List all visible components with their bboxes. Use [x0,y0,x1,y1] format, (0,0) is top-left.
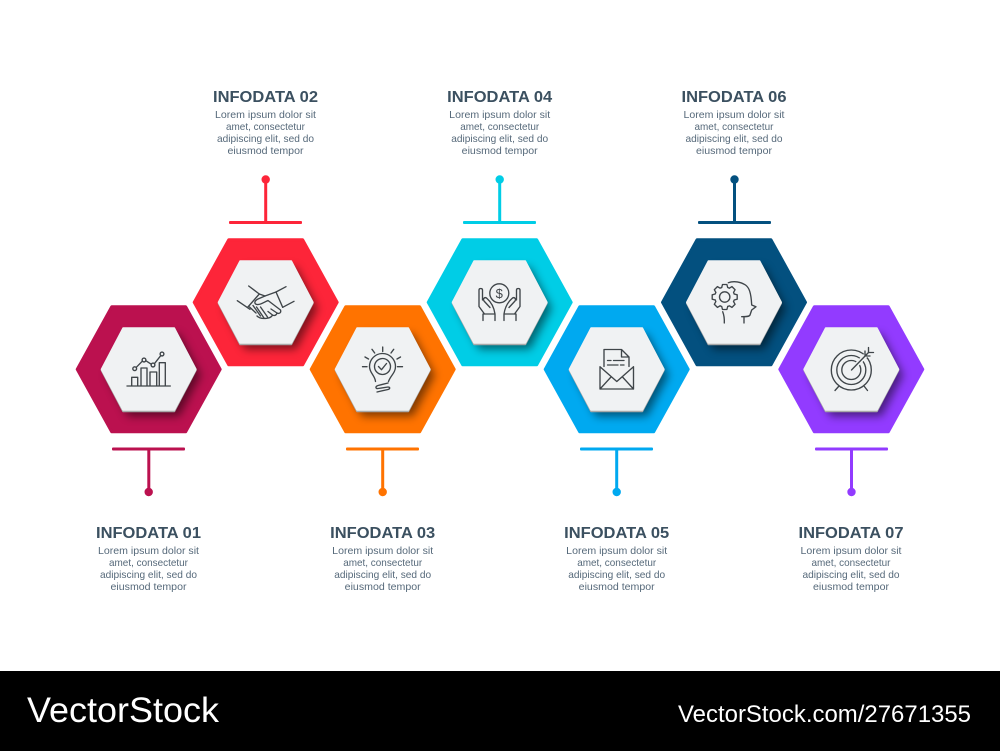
text: infodata 06: amet, consectetur [694,121,774,133]
text: infodata 04: Lorem ipsum dolor sit [449,109,550,121]
icon: hands holding coin [479,284,520,320]
text: infodata 05: adipiscing elit, sed do [568,569,665,581]
hexagon 03 [311,307,454,432]
connector 06 [698,175,771,224]
hexagon 06 [662,240,806,365]
connector 04 [463,175,536,224]
connector 02 [229,175,302,224]
text: infodata 05: INFODATA 05 [564,525,669,542]
text: infodata 03: INFODATA 03 [330,525,435,542]
text: infodata 01 [96,525,201,593]
text: infodata 02: eiusmod tempor [228,145,304,157]
panel: infodata 07 [780,307,923,593]
connector 03 [346,448,419,496]
text: infodata 06 [682,89,787,157]
text: infodata 01: Lorem ipsum dolor sit [98,545,199,557]
text: infodata 07: Lorem ipsum dolor sit [800,545,902,557]
text: infodata 03: Lorem ipsum dolor sit [332,545,433,557]
hexagon 01 [77,307,220,432]
text: infodata 06: INFODATA 06 [682,89,787,106]
text: infodata 05: Lorem ipsum dolor sit [566,545,667,557]
text: infodata 02: amet, consectetur [226,121,305,133]
text: infodata 03: eiusmod tempor [345,581,421,593]
panel: infodata 03 [311,307,454,593]
text: infodata 06: Lorem ipsum dolor sit [684,109,785,121]
text: infodata 04: amet, consectetur [460,121,540,133]
icon: light bulb [362,347,402,392]
text: infodata 02: INFODATA 02 [213,89,318,106]
brand name: VectorStock [27,691,220,730]
text: infodata 04: INFODATA 04 [447,89,552,106]
text: infodata 07 [798,525,904,593]
hexagon 07 [780,307,923,432]
panel: infodata 05 [545,307,688,593]
hexagon 04 [428,240,571,365]
icon: head with gear [712,282,756,323]
text: infodata 03: amet, consectetur [343,557,423,569]
icon: envelope with document [600,350,634,389]
hexagon 02 [194,240,337,365]
icon: target with arrow [831,348,874,390]
hexagon 05 [545,307,688,432]
connector 05 [580,448,653,496]
text: infodata 01: eiusmod tempor [110,581,187,593]
text: infodata 07: adipiscing elit, sed do [802,569,900,581]
icon: handshake [237,286,294,318]
watermark bar [0,671,1000,751]
icon: hands holding coin: $ [496,286,504,301]
panel: infodata 04 [428,89,571,365]
text: infodata 04 [447,89,552,157]
text: infodata 01: INFODATA 01 [96,525,201,542]
text: infodata 02: Lorem ipsum dolor sit [215,109,316,121]
panel: infodata 06 [662,89,806,365]
icon: bar chart [127,352,170,386]
panel: infodata 01 [77,307,220,593]
text: infodata 02: adipiscing elit, sed do [217,133,314,145]
text: infodata 03 [330,525,435,593]
text: infodata 07: INFODATA 07 [798,525,904,542]
text: infodata 04: eiusmod tempor [462,145,538,157]
text: infodata 02 [213,89,318,157]
text: infodata 06: adipiscing elit, sed do [686,133,783,145]
text: infodata 01: adipiscing elit, sed do [100,569,197,581]
image url: VectorStock.com/27671355 [678,701,971,728]
text: infodata 04: adipiscing elit, sed do [451,133,548,145]
text: infodata 06: eiusmod tempor [696,145,772,157]
text: infodata 05: amet, consectetur [577,557,657,569]
panel: infodata 02 [194,89,337,365]
text: infodata 03: adipiscing elit, sed do [334,569,431,581]
connector 01 [112,448,185,496]
text: infodata 05: eiusmod tempor [579,581,655,593]
connector 07 [815,448,888,496]
text: infodata 07: amet, consectetur [812,557,891,569]
text: infodata 01: amet, consectetur [109,557,188,569]
text: infodata 05 [564,525,669,593]
text: infodata 07: eiusmod tempor [813,581,889,593]
